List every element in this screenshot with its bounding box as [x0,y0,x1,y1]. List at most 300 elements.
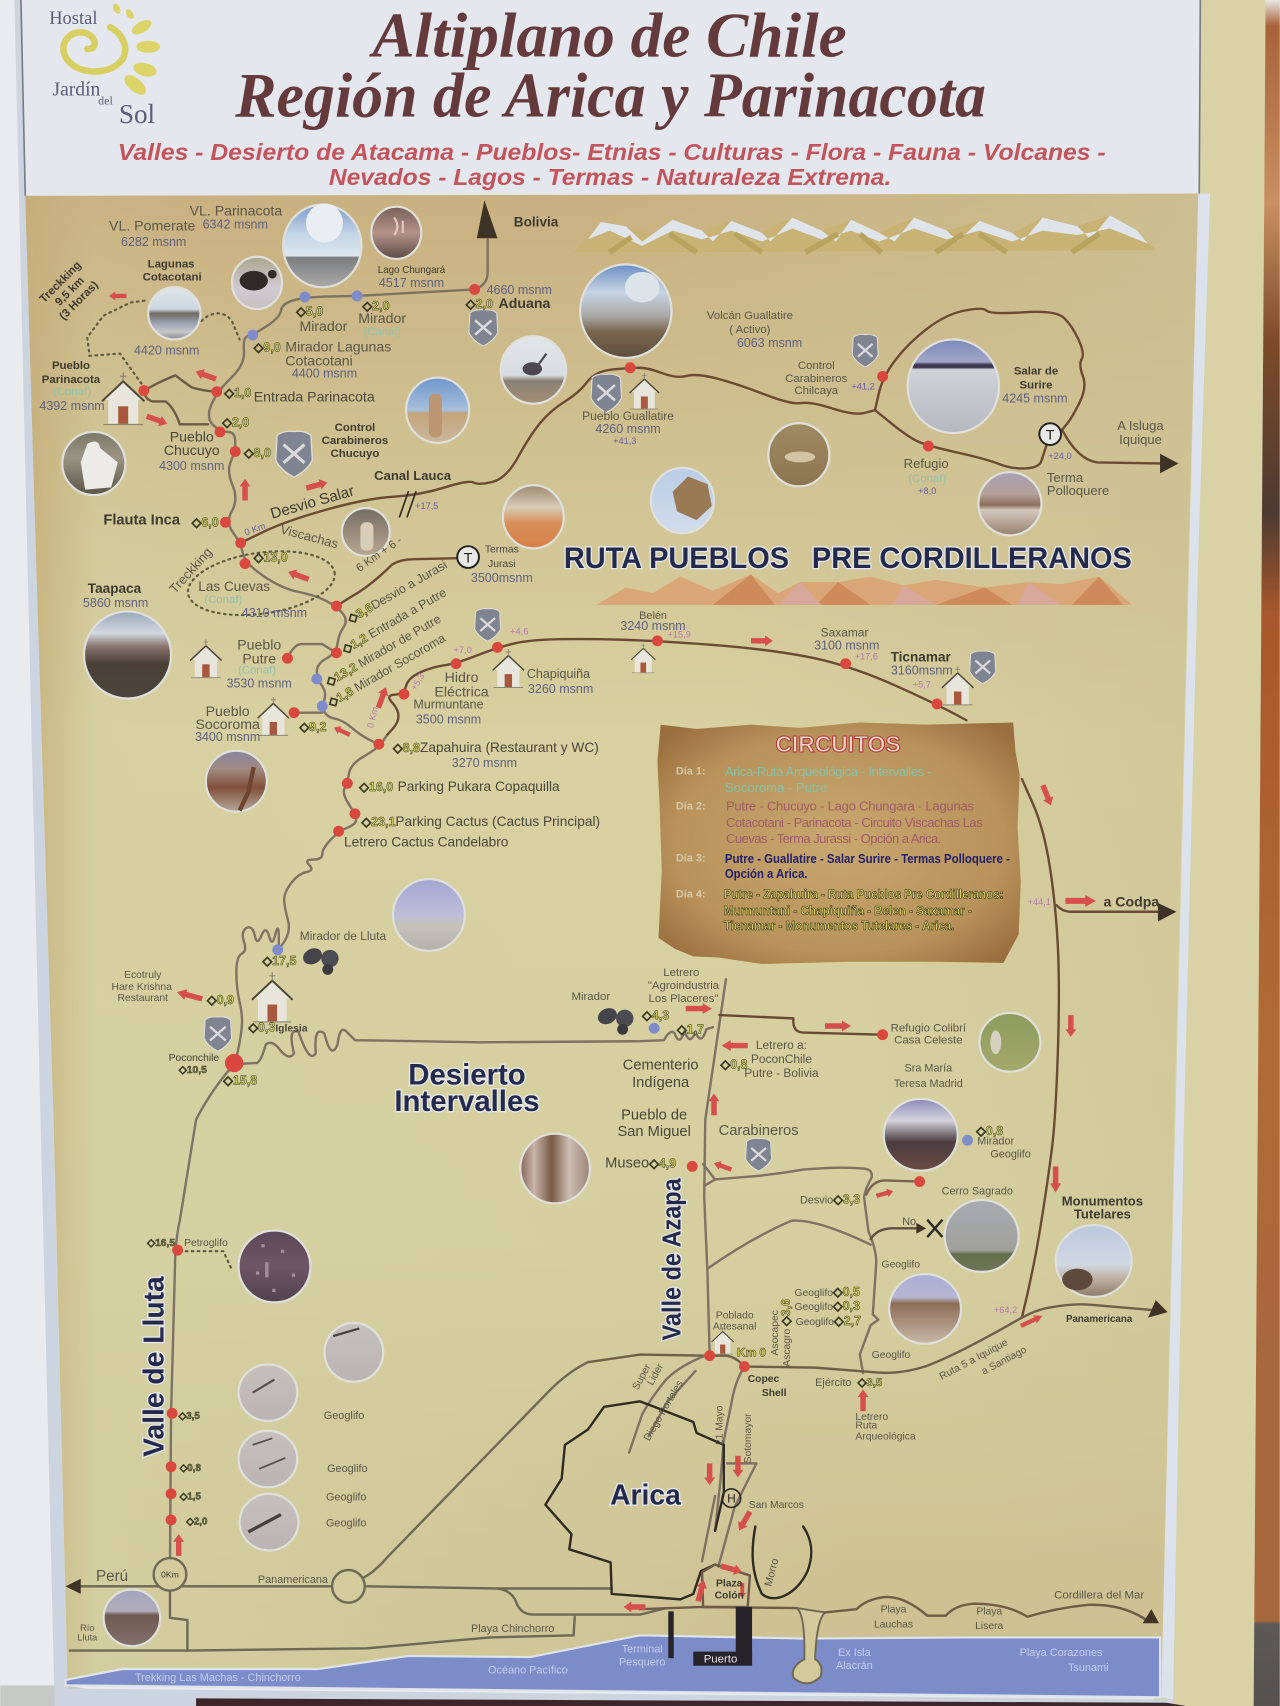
labels: Ruta Pueblos: Belén [639,610,667,622]
route: Azapa valley [704,979,726,1355]
labels: coast: Alacrán [836,1660,873,1672]
route: southern coast [640,1597,1145,1619]
labels: Ruta Pueblos: +15,9 [667,630,691,640]
text: día 4 [676,887,1003,933]
labels: Azapa valley: Geoglifo◇2,7 [796,1314,861,1328]
labels: coast: Playa Corazones [1020,1647,1103,1659]
panel: circuitos [657,722,1021,964]
text: día 3: Día 3: [676,853,706,865]
labels: north altiplano: Parinacota [42,374,101,386]
labels: north altiplano: 0 Km [243,521,267,538]
arrow: Panamericana south [1148,1300,1168,1318]
photo: ñandú [501,336,566,404]
labels: Azapa valley: Asocapec [770,1310,781,1355]
labels: east altiplano: Carabineros [785,373,848,385]
labels: Lluta valley sites: Petroglifo [184,1238,228,1249]
labels: north altiplano: Desvio Salar [269,483,356,523]
photo: Lagunas Cotacotani [148,287,200,339]
labels: Lluta and Intervalles: Indígena [632,1075,690,1091]
text: día 1: Día 1: [676,766,706,778]
labels: Azapa valley: San Miguel [617,1124,691,1140]
labels: Lluta valley sites: Panamericana [258,1574,329,1586]
labels: Azapa valley: Carabineros [719,1123,799,1139]
labels: north altiplano: ◇2,0 [465,297,493,311]
labels: Azapa valley: Copec [748,1374,780,1385]
red direction arrows [109,292,1096,1612]
labels: Arica city: Morro [763,1557,781,1588]
labels: Lluta and Intervalles: Cementerio [623,1058,699,1074]
labels: Lluta valley sites: Lluta [77,1633,98,1643]
text: día 1 [676,764,932,795]
labels: Azapa valley: Km 0 [737,1346,766,1360]
photo: geoglyph hillside [889,1274,961,1344]
text: día 1: Arica-Ruta Arqueológica - Intervalles - [725,764,932,779]
photo: Salar de Surire [908,339,999,433]
labels: Lluta and Intervalles: Letrero [663,967,699,979]
Morro outline [753,1526,811,1598]
sea [66,1608,1160,1697]
arrow: blocked road [916,1223,926,1234]
Plaza Colón streets [702,1565,750,1607]
title: Altiplano de Chile [368,1,847,71]
labels: east altiplano: Surire [1020,379,1053,391]
heading: Ruta Pueblos Pre Cordilleranos: PRE CORDILLERANOS [812,542,1132,575]
labels: north altiplano: VL. Pomerate [109,218,196,234]
heading: Ruta Pueblos Pre Cordilleranos [564,542,1132,575]
labels: north altiplano: 6 Km + 6 - [354,534,405,575]
labels: north altiplano: (Canal) [363,326,401,338]
labels: north altiplano: Bolivia [514,214,559,229]
icons: binoculars [300,945,633,1035]
route: Intervalles road [235,1027,713,1064]
labels: Lluta and Intervalles: Refugio Colibrí [891,1022,967,1034]
labels: north altiplano: 9,5 km [53,275,87,308]
labels: Lluta valley sites: Geoglifo [327,1463,368,1475]
labels: Azapa valley: ◇3,5 [857,1377,883,1389]
photo: vicuñas [768,423,829,486]
photo: llama [406,378,469,443]
route: Salar road [241,368,875,543]
labels: Lluta and Intervalles [112,929,967,1091]
labels: north altiplano: ◇2,0 [362,299,390,313]
labels: east altiplano: (Conaf) [908,473,946,485]
labels: Azapa valley: Geoglifo [882,1260,920,1271]
photo: petroglyph [239,1231,310,1302]
labels: Putre area: 3270 msnm [452,756,517,770]
port: Puerto: Puerto [704,1653,737,1665]
labels: north altiplano: Carabineros [322,435,388,447]
labels: Putre area: ◇3,6Desvio a Jurasi [344,558,449,627]
labels: Lluta and Intervalles: Los Placeres" [649,993,719,1005]
route: Canal Lauca crossing [400,492,416,517]
labels: north altiplano: ◇9,0 [253,340,281,354]
photo: geoglyph 4 [240,1494,298,1550]
icons: village churches [102,373,973,1354]
labels: Ruta Pueblos: +4,6 [510,626,528,636]
labels: Putre area: 3400 msnm [195,730,260,744]
labels: Ruta Pueblos: Murmuntane [413,697,484,711]
route: Panamericana west [364,1362,588,1578]
labels: Lluta and Intervalles: ◇0,9 [206,993,234,1007]
photo: flamingos [371,207,421,259]
labels: Lluta valley sites [77,1238,554,1643]
labels: north altiplano: 4517 msnm [379,276,444,290]
labels: Putre area: (Conaf) [238,664,276,676]
labels: Lluta valley sites: Playa Chinchorro [471,1623,554,1635]
text: día 4: Ticnamar - Monumentos Tutelares - Arica. [724,918,954,933]
labels: coast: Trekking Las Machas - Chinchorro [135,1672,301,1684]
mountain strip: orange range [596,574,1132,605]
labels: north altiplano: Pueblo [52,360,90,372]
photo: geoglyph 2 [239,1364,297,1421]
arrow: Perú [66,1579,81,1594]
labels: Azapa valley: Monumentos [1062,1194,1143,1209]
labels: Azapa valley: Ascagro ◇3,6 [779,1299,793,1367]
labels: Lluta valley sites: ◇16,5 [146,1238,175,1249]
labels: north altiplano: Control [335,422,375,434]
photo: puma [651,468,714,533]
labels: Ruta Pueblos: +44,1 [1028,897,1051,907]
labels: Putre area: Socoroma [195,716,260,732]
labels: east altiplano: Volcán Guallatire [707,310,793,322]
labels: Arica city: Sotomayor [743,1413,754,1463]
labels: Putre area [83,558,600,849]
text: día 2: Cotacotani - Parinacota - Circuito Viscachas Las [726,815,983,830]
labels: coast: Lauchas [874,1620,913,1631]
labels: east altiplano: +41,3 [613,436,636,446]
labels: Lluta and Intervalles: Ecotruly [124,970,162,981]
labels: coast: Cordillera del Mar [1054,1589,1144,1601]
labels: north altiplano: 4420 msnm [134,344,199,358]
labels: Ruta Pueblos: 3240 msnm [620,619,686,633]
labels: Azapa valley: Tutelares [1074,1207,1131,1222]
labels: Putre area: ◇23,1Parking Cactus (Cactus Principal) [360,814,600,829]
labels: Azapa valley: Geoglifo◇0,3 [794,1299,860,1313]
labels: north altiplano: Canal Lauca [374,468,452,483]
labels: Ruta Pueblos: +7,0 [454,645,472,655]
labels: Lluta and Intervalles: Hare Krishna [112,982,172,993]
labels: Azapa valley: Shell [762,1388,787,1399]
labels: Ruta Pueblos: 3260 msnm [528,682,593,696]
labels: north altiplano: Mirador [358,310,406,326]
labels: Lluta and Intervalles: ◇0,3Iglesia [247,1020,308,1034]
labels: Azapa valley: a Santiago [980,1345,1029,1378]
photo: alpaca viscachas [342,508,390,556]
labels: Azapa valley: No [902,1216,916,1228]
labels: Azapa valley: Pueblo de [621,1108,687,1124]
route: Poconchile to Mirador de Lluta and Zapahuira [235,734,388,1063]
labels: Azapa valley: Geoglifo [990,1149,1031,1161]
labels: Azapa valley: Cerro Sagrado [942,1186,1013,1198]
labels: Putre area: Pueblo [206,703,250,719]
labels: Lluta and Intervalles: Restaurant [118,993,168,1004]
labels: Lluta and Intervalles: Casa Celeste [894,1034,963,1046]
labels: coast [135,1589,1144,1684]
labels: north altiplano: Flauta Inca [103,512,181,528]
labels: Lluta valley sites: Perú [96,1568,128,1585]
mountain strip: snowy peaks [574,215,1156,252]
labels: Lluta valley sites: ◇0,8 [179,1463,201,1474]
labels: Arica city [631,1356,804,1601]
labels: Ruta Pueblos: a Codpa [1103,893,1159,909]
photo: hummingbird [979,1013,1040,1072]
labels: east altiplano: Iquique [1119,432,1162,447]
photo: dark bird [232,257,282,309]
photos [62,203,1132,1646]
labels: north altiplano: Entrada Parinacota [254,388,375,404]
labels: north altiplano: Termas [485,545,519,556]
text: día 4: Putre - Zapahuira - Ruta Pueblos Pre Cordilleranos: [724,887,1003,902]
route: Azapa east branches [703,1164,920,1373]
text: día 1: Socoroma - Putre [725,780,827,795]
text: día 3: Opción a Arica. [725,866,808,881]
route: Surire north loop [875,309,1084,430]
subtitle: Nevados - Lagos - Termas - Naturaleza Extrema. [329,164,891,190]
arrow: Codpa [1158,903,1176,922]
labels: east altiplano: 4245 msnm [1002,392,1068,406]
labels: north altiplano: Treckking [38,259,84,305]
labels: Lluta and Intervalles: Poconchile [169,1053,219,1064]
labels: north altiplano: Cotacotani [143,272,202,284]
photo: group of people [884,1099,958,1171]
heading: Arica: Arica [610,1479,681,1511]
labels: Arica city: Diego Portales [642,1379,686,1443]
photo: Río Lluta [104,1590,160,1646]
labels: Putre area: Letrero Cactus Candelabro [344,834,509,849]
labels: north altiplano: 4310 msnm [242,606,307,620]
labels: Azapa valley [605,1108,1143,1442]
labels: east altiplano: 4260 msnm [595,422,661,436]
port: Puerto [693,1607,752,1666]
route: horizontal Panamericana [79,1586,612,1588]
text: día 2: Cuevas - Terma Jurassi - Opción a Arica. [726,831,941,846]
labels: Lluta and Intervalles: ◇17,5 [261,954,296,968]
labels: north altiplano [38,202,559,620]
labels: Azapa valley: Ejército [815,1377,851,1389]
labels: coast: Océano Pacífico [488,1664,568,1676]
labels: north altiplano: Jurasi [488,559,516,570]
labels: east altiplano: Terma [1047,470,1084,485]
route: to Isluga [1062,430,1164,463]
arrow: Bolivia [477,200,497,238]
dotted trails [87,300,339,1268]
icon: termas markers: T [464,550,473,566]
panel: header [21,0,1200,196]
logo: Hostal Jardín del Sol: del [98,93,113,107]
route: coast road [70,1617,575,1651]
labels: Ruta Pueblos [409,610,1159,909]
labels: north altiplano: 4660 msnm [487,283,552,297]
photo: guanaco [206,751,267,812]
labels: east altiplano [582,310,1164,498]
city outline: Arica [545,1401,724,1599]
labels: Azapa valley: Mirador [977,1136,1015,1148]
route: link to coast [170,1591,187,1651]
labels: coast: Ex Isla [838,1647,872,1659]
labels: Azapa valley: ◇0,8 [975,1124,1003,1138]
labels: Ruta Pueblos: Hidro [445,669,479,685]
labels: Arica city: San Marcos [749,1500,804,1511]
labels: Lluta and Intervalles: Putre - Bolivia [744,1066,819,1080]
labels: east altiplano: 6063 msnm [737,336,802,350]
logo: Hostal Jardín del Sol [49,2,160,129]
route: Colibrí road [719,1015,883,1035]
photo: museum mummy [520,1134,590,1203]
labels: Lluta and Intervalles: ◇1,7 [676,1023,704,1037]
route: to Codpa [1057,905,1159,912]
labels: north altiplano: Treckking [166,545,215,596]
labels: north altiplano: ◇2,0 [221,416,249,430]
route: Putre spur [287,644,336,658]
labels: Lluta valley sites: ◇1,5 [179,1491,201,1502]
labels: Putre area: ◇13,2 Mirador de Putre [322,612,443,690]
labels: north altiplano: (Conaf) [53,386,91,398]
photo: geoglyph 1 [324,1323,383,1382]
pier [668,1611,674,1658]
labels: Putre area: Taapaca [88,581,142,596]
text: día 3 [676,851,1010,881]
labels: Ruta Pueblos: +5,3 [409,671,427,692]
text: día 2 [676,799,983,846]
labels: Putre area: Pueblo [237,637,281,653]
labels: north altiplano: ◇6,0 [191,516,219,530]
icon: hospital marker [722,1489,741,1507]
labels: Lluta valley sites: ◇3,5 [178,1411,200,1422]
labels: Azapa valley: Letrero [855,1412,888,1423]
labels: Ruta Pueblos: Ticnamar [891,650,952,665]
photo: clouds over lake [283,203,361,287]
icon: termas markers: T [1046,427,1055,443]
labels: Azapa valley: +64,2 [994,1305,1017,1315]
labels: Ruta Pueblos: Chapiquiña [527,667,590,681]
labels: Azapa valley: Panamericana [1066,1314,1133,1325]
labels: north altiplano: ◇5,0 [295,305,323,319]
route: Codpa road to Panamericana [1022,779,1059,1318]
labels: north altiplano: Cotacotani [285,353,353,369]
photo: white alpaca [62,432,125,495]
labels: Ruta Pueblos: Eléctrica [434,683,489,699]
labels: north altiplano: Lago Chungará [378,265,446,276]
route: Chinchorro connection [497,1588,666,1615]
route: Termas Jurasi [336,558,457,606]
labels: Arica city: Plaza [716,1578,743,1589]
labels: Lluta valley sites: Geoglifo [326,1517,366,1529]
labels: Arica city: Super [631,1362,654,1392]
heading: Valle de Lluta: Valle de Lluta [137,1276,169,1457]
arrow: Isluga [1160,454,1179,473]
labels: north altiplano: +17,5 [415,501,438,511]
labels: Lluta and Intervalles: Letrero a: [756,1038,807,1052]
labels: coast: Tsunami [1068,1662,1109,1674]
subtitle [118,139,1106,190]
labels: north altiplano: (3 Horas) [57,279,101,323]
labels: north altiplano: Chucuyo [331,448,379,460]
labels: Ruta Pueblos: 3500 msnm [416,713,481,727]
logo: Hostal Jardín del Sol: Hostal [49,8,97,28]
route: Pueblos Pre Cordilleranos [388,639,966,734]
heading: Desierto Intervalles: Desierto [408,1059,526,1092]
labels: Lluta and Intervalles: ◇15,8 [222,1074,257,1088]
labels: north altiplano: Las Cuevas [198,579,270,594]
labels: Azapa valley: Ruta 5 a Iquique [938,1337,1010,1383]
labels: Putre area: 0 Km [365,705,380,729]
heading: Ruta Pueblos Pre Cordilleranos: RUTA PUEBLOS [564,542,789,575]
labels: coast: Lisera [975,1621,1004,1632]
photo: Terma Polloquere [978,472,1041,535]
arrow: Cordillera del Mar [1143,1609,1159,1623]
peninsula: Isla Alacrán [793,1608,825,1683]
labels: Putre area: 5860 msnm [83,596,148,610]
photo: Monumentos Tutelares [1056,1225,1132,1297]
labels: Lluta and Intervalles: Sra María [904,1063,953,1075]
route: Lluta valley road [170,1063,235,1560]
labels: east altiplano: Salar de [1014,365,1058,377]
labels: north altiplano: Aduana [499,295,550,311]
labels: north altiplano: Mirador [299,318,348,334]
labels: Lluta valley sites: ◇2,0 [185,1516,208,1527]
labels: north altiplano: ◇8,0 [243,446,271,460]
route: Panamericana east [588,1304,1151,1373]
labels: Putre area: ◇9,2 [298,720,326,734]
labels: north altiplano: Pueblo [170,429,214,445]
arrowheads: route ends [66,200,1179,1623]
labels: Lluta and Intervalles: ◇4,3 [641,1008,669,1022]
labels: coast: Terminal [622,1644,663,1656]
labels: Lluta and Intervalles: PoconChile [751,1052,812,1066]
labels: north altiplano: 6342 msnm [203,217,268,231]
labels: Lluta and Intervalles: ◇10,5 [178,1065,207,1076]
labels: Azapa valley: Poblado [716,1311,754,1322]
labels: Azapa valley: Geoglifo◇0,5 [794,1285,860,1299]
labels: Arica city: Colón [715,1590,744,1601]
labels: Putre area: ◇16,0 Parking Pukara Copaquilla [358,779,560,794]
labels: Lluta valley sites: Geoglifo [326,1491,366,1503]
labels: north altiplano: 4392 msnm [39,399,105,413]
text: día 4: Murmuntani - Chapiquiña - Belen - Saxamar - [724,903,972,918]
labels: Azapa valley: Museo◇4,9 [605,1155,676,1171]
roundabouts: 0Km [161,1570,179,1580]
icon: hospital marker: H [727,1492,736,1506]
roundabouts [154,1558,365,1603]
labels: Lluta and Intervalles: Teresa Madrid [894,1078,963,1090]
text: día 2: Día 2: [676,800,706,812]
labels: east altiplano: Pueblo Guallatire [582,409,674,423]
route: Parinacota loop [144,375,217,424]
heading: CIRCUITOS: CIRCUITOS [775,731,901,757]
labels: Putre area: ◇1,2 Entrada a Putre [339,585,449,657]
labels: Putre area: 3530 msnm [227,677,292,691]
text: día 4: Día 4: [676,889,706,901]
labels: Azapa valley: Ruta [855,1421,877,1432]
labels: east altiplano: Chilcaya [794,385,839,397]
heading: Valle de Azapa: Valle de Azapa [656,1178,686,1340]
labels: Lluta and Intervalles: Mirador de Lluta [300,929,387,943]
subtitle: Valles - Desierto de Atacama - Pueblos- Etnias - Culturas - Flora - Fauna - Volcanes - [118,139,1106,165]
labels: Azapa valley: Artesanal [713,1322,756,1333]
logo: Hostal Jardín del Sol: Sol [119,99,156,129]
photo: Taapaca [84,611,171,699]
route: Arica streets [629,1356,756,1567]
labels: east altiplano: Control [798,360,835,372]
labels: north altiplano: Lagunas [148,259,195,271]
labels: Azapa valley: Desvio◇3,3 [800,1192,860,1206]
route: Zapahuira to Bolivia [209,239,488,744]
photo: geoglyph 3 [239,1431,297,1487]
labels: north altiplano: 4400 msnm [292,367,357,381]
labels: east altiplano: Refugio [904,456,949,471]
labels: coast: Pesquero [619,1657,665,1669]
labels: east altiplano: +41,2 [851,382,875,392]
